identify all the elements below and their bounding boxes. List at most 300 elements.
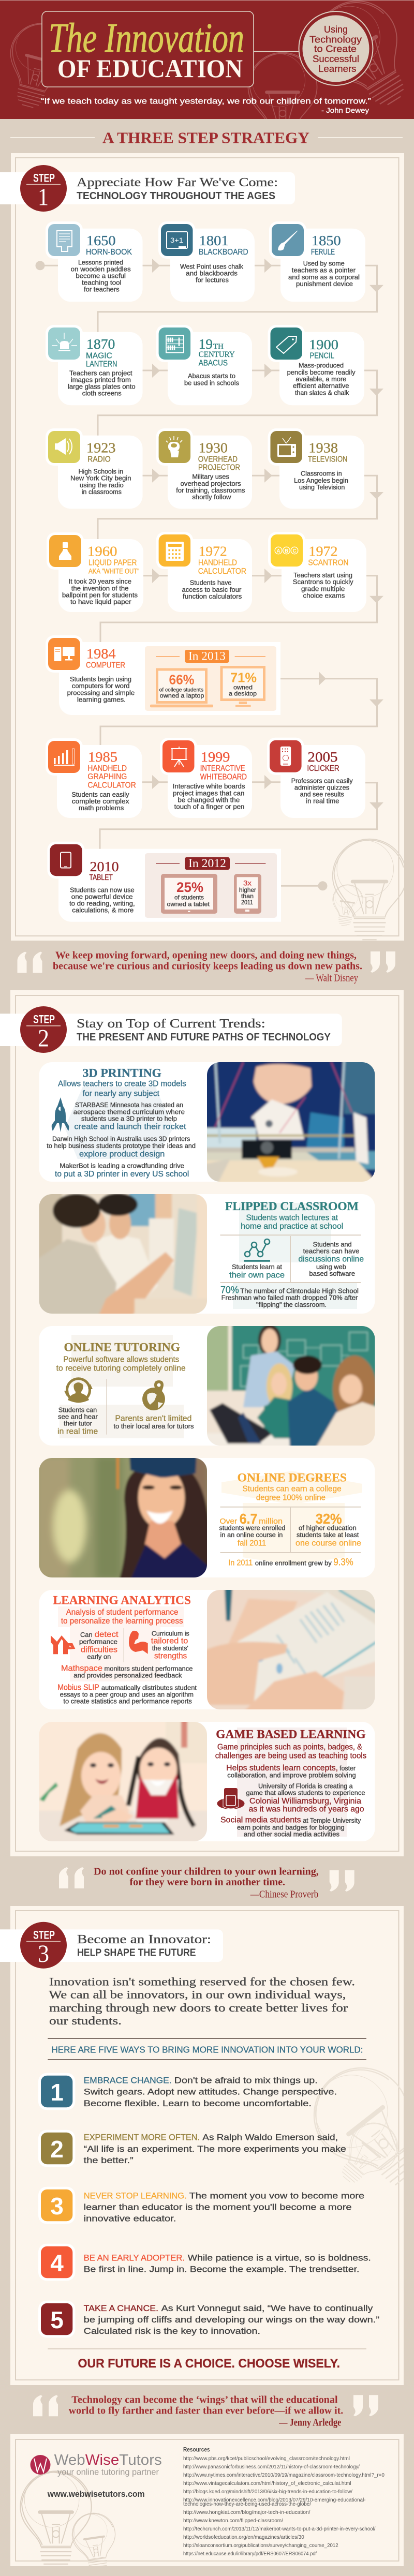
card: 1870 magic lantern (46, 325, 143, 405)
social media copy: Social media students (220, 1816, 301, 1825)
way 1 embrace change (38, 2073, 337, 2110)
quote: walt disney: We keep moving forward, opening new doors, and doing new things, (55, 950, 357, 961)
connector line (254, 51, 299, 52)
resources list: http://www.nytimes.com/interactive/2010/09/19/magazine/classroom-technology.html?_r=0 (183, 2472, 385, 2478)
quote: chinese proverb: Do not confine your children to your own learning, (94, 1866, 319, 1877)
card: 2010 tablet with 2012 stats: TABLET (89, 873, 113, 882)
description: New York City begin (70, 474, 131, 482)
description: on wooden paddles (71, 265, 131, 273)
description: the invention of the (71, 584, 128, 592)
description (182, 579, 242, 600)
description: teachers as a pointer (292, 266, 356, 274)
tutoring copy right: Parents aren't limited (115, 1414, 191, 1423)
card: 1801 blackboard: BLACKBOARD (199, 248, 248, 257)
logo (30, 2452, 162, 2477)
panel: flipped classroom: Students watch lectures at (246, 1213, 338, 1222)
quote: jenny arledge: world to fly farther and faster than ever before—if we allow it. (69, 2406, 343, 2417)
icon: calculator (159, 534, 190, 567)
description: Students have (190, 579, 231, 587)
intro paragraph (49, 1975, 355, 2027)
step 1 heading (0, 165, 295, 212)
concepts copy: collaboration, and improve problem solving (227, 1771, 356, 1779)
description: large glass plates onto (68, 383, 136, 391)
description: be used in schools (184, 379, 239, 387)
icon: scantron bubbles: C (293, 548, 296, 554)
icon: magic lantern (48, 327, 80, 360)
body copy: students use a 3D printer to help (81, 1114, 177, 1122)
title box (42, 11, 254, 87)
body copy: create and launch their rocket (74, 1123, 186, 1131)
panel: 3d printing: Allows teachers to create 3D models (58, 1079, 186, 1088)
card: 2010 tablet with 2012 stats: 2010 (90, 859, 119, 874)
quote: walt disney (18, 950, 395, 984)
laptop stat: owned a laptop (160, 692, 204, 699)
icon: closing quote mark (330, 1870, 354, 1892)
card: 1900 pencil (268, 325, 364, 405)
detection copy: Can (80, 1631, 93, 1639)
title script line: The Innovation (49, 16, 244, 61)
panel: online tutoring: to receive tutoring completely online (56, 1364, 186, 1373)
body copy (47, 1101, 196, 1179)
phone stat: 3x (243, 879, 252, 887)
way 2 experiment more often: EXPERIMENT MORE OFTEN. (84, 2133, 200, 2142)
step 3 heading: 3 (38, 1940, 49, 1968)
curriculum copy (151, 1630, 189, 1661)
description: Military uses (192, 473, 229, 481)
card: 1960 liquid paper: 1960 (87, 543, 117, 559)
way 3 never stop learning: The moment you vow to become more (189, 2192, 364, 2201)
quote: jenny arledge (33, 2394, 378, 2428)
description: in real time (306, 797, 339, 805)
panel: online degrees: degree 100% online (256, 1494, 326, 1502)
university of florida copy: as it was hundreds of years ago (249, 1805, 364, 1814)
icon: horn-book (48, 224, 80, 256)
card: 2005 iclicker: ICLICKER (307, 764, 339, 773)
quote: chinese proverb (59, 1866, 354, 1900)
description: Los Angeles begin (294, 477, 348, 484)
icon: opening quote mark (18, 952, 42, 973)
description: project images that can (173, 789, 244, 797)
heading: 3D PRINTING (83, 1067, 161, 1080)
icon: remote clicker (270, 740, 302, 772)
way 5 take a chance: Calculated risk is the key to innovation. (84, 2327, 260, 2336)
mathspace and mobius copy: essays to a peer group and uses an algorithm (60, 1691, 194, 1699)
header banner (0, 0, 414, 119)
description: math problems (79, 804, 124, 812)
subtitle circle (299, 11, 373, 85)
description: Lessons printed (78, 258, 123, 266)
way 1 embrace change: Don't be afraid to mix things up. (174, 2076, 318, 2086)
social media copy (220, 1816, 361, 1838)
way 5 take a chance: TAKE A CHANCE. (84, 2304, 158, 2313)
logo: your online tutoring partner (57, 2467, 159, 2477)
dividers (220, 1507, 361, 1553)
description: ballpoint pen for students (62, 591, 138, 599)
title serif line: OF EDUCATION (57, 54, 243, 83)
icon: blackboard: 3+1 (170, 236, 183, 244)
way 3 never stop learning: innovative educator. (84, 2214, 176, 2224)
icon: tablet (50, 844, 82, 876)
resources list: http://www.knewton.com/flipped-classroom/ (183, 2518, 283, 2524)
photo: 3d printer (204, 1060, 378, 1184)
description: processing and simple (67, 689, 135, 696)
header quote: - John Dewey (321, 106, 369, 114)
description (176, 473, 245, 501)
description: computers for word (72, 682, 129, 690)
description: calculations, & more (72, 906, 134, 914)
heading: GAME BASED LEARNING (216, 1728, 366, 1740)
description (294, 470, 348, 491)
stat copy: Freshman who failed math dropped 70% after (221, 1293, 358, 1301)
desktop stat: owned (233, 684, 253, 691)
tablet stat: 25% (176, 880, 203, 895)
card: 1801 blackboard: 1801 (199, 233, 229, 248)
stat copy: teachers can have (303, 1247, 359, 1255)
panel: 3d printing (39, 1060, 378, 1184)
icon: decline chart (51, 1635, 75, 1654)
resources list: http://www.pbs.org/kcet/publicschool/evolving_classroom/technology.html (183, 2455, 350, 2462)
card: 19th century abacus: CENTURY (199, 350, 235, 359)
curriculum copy: the students' (152, 1644, 188, 1652)
description: and some as a corporal (288, 273, 360, 281)
card: 1930 overhead projector: 1930 (199, 440, 228, 455)
step 3 heading (0, 1922, 223, 1969)
intro paragraph: marching through new doors to create better lives for (49, 2001, 348, 2014)
stat: 6.7 million: fall 2011 (238, 1539, 266, 1548)
card: 1999 interactive whiteboard: 1999 (201, 749, 230, 765)
panel: footer (10, 2434, 404, 2574)
way 4 be an early adopter: While patience is a virtue, so is boldness. (188, 2254, 371, 2263)
stat copy: using web (316, 1263, 346, 1271)
resources list: http://sloanconsortium.org/publications/survey/changing_course_2012 (183, 2542, 338, 2549)
icon: closing quote mark (353, 2395, 378, 2416)
description: Teachers start using (293, 571, 352, 579)
body copy: aerospace themed curriculum where (73, 1108, 185, 1115)
logo: WebWiseTutors (54, 2452, 162, 2468)
subtitle circle: to Create (314, 44, 357, 54)
card: 1938 television (268, 428, 364, 509)
description: to do reading, writing, (69, 900, 135, 907)
card: 1984 computer with 2013 stats (46, 635, 280, 715)
card: 19th century abacus: TH (213, 343, 224, 351)
icon: bar graph (48, 741, 80, 773)
card: 1960 liquid paper: AKA "WHITE OUT" (88, 567, 140, 575)
resources list: http://www.innovationexcellence.com/blog/2013/07/29/10-emerging-educational- (183, 2497, 366, 2503)
stat: 6.7 million: million (259, 1517, 283, 1526)
decorative bulbs bottom right (329, 839, 406, 940)
card: 1984 computer with 2013 stats: COMPUTER (86, 661, 125, 670)
divider (106, 1379, 107, 1435)
closing line: OUR FUTURE IS A CHOICE. CHOOSE WISELY. (78, 2357, 340, 2371)
card: 1938 television: TELEVISION (308, 455, 347, 464)
tutoring copy left: in real time (57, 1427, 98, 1436)
description: Students can now use (70, 886, 135, 894)
step 1 heading: 1 (38, 184, 49, 211)
description (71, 791, 129, 812)
step 1 heading: STEP (33, 172, 55, 185)
stat copy: their own pace (229, 1271, 285, 1279)
phone stat (234, 874, 261, 914)
description: overhead projectors (180, 480, 241, 487)
detection copy (79, 1630, 119, 1661)
icon: scantron bubbles: A (276, 548, 280, 554)
icon: globe with pin (142, 1380, 165, 1410)
stat: 32 percent: 32% (316, 1511, 342, 1527)
quote: jenny arledge: Technology can become the ‘wings’ that will the educational (71, 2394, 338, 2405)
step 1 heading: Appreciate How Far We've Come: (77, 176, 278, 189)
description: to have liquid paper (70, 598, 131, 605)
way 3 never stop learning (38, 2187, 364, 2224)
card: 1870 magic lantern: LANTERN (86, 360, 117, 369)
photo: students with teacher (204, 1323, 378, 1448)
card: 1900 pencil: 1900 (309, 337, 338, 352)
step 2 heading (0, 1006, 342, 1053)
way 5 take a chance (38, 2301, 379, 2337)
desktop stat (221, 667, 264, 707)
description: using Television (299, 483, 345, 491)
icon: scantron bubbles (271, 534, 303, 567)
description (184, 372, 239, 387)
description (180, 263, 243, 284)
card: 1938 television: 1938 (308, 440, 338, 455)
description (293, 571, 353, 599)
panel: learning analytics: to personalize the learning process (61, 1617, 183, 1626)
resources list: http://www.panasonicforbusiness.com/2012/11/history-of-classroom-technology/ (183, 2464, 360, 2470)
social media copy: and other social media activities (244, 1830, 339, 1838)
card: 1801 blackboard (158, 221, 255, 302)
tablet stat: of students (174, 894, 204, 901)
description: complete complex (72, 797, 129, 805)
description: punishment device (296, 280, 353, 288)
body copy: Darwin High School in Australia uses 3D printers (52, 1135, 190, 1143)
step 2 heading: THE PRESENT AND FUTURE PATHS OF TECHNOLOGY (77, 1032, 331, 1043)
way 5 take a chance: As Kurt Vonnegut said, “We have to continually (161, 2304, 373, 2313)
description (68, 369, 136, 397)
card: 1850 ferule: 1850 (312, 233, 341, 248)
resources list: http://www.hongkiat.com/blog/major-tech-in-education/ (183, 2509, 310, 2515)
mathspace and mobius copy: automatically distributes student (101, 1684, 197, 1691)
stat copy: Students learn at (232, 1263, 282, 1271)
decorative bulbs (20, 2471, 120, 2574)
description: efficient alternative (293, 382, 349, 390)
description: images printed from (71, 376, 131, 383)
card: 1923 radio: 1923 (86, 440, 116, 455)
photo: children with tablet (36, 1719, 210, 1844)
stat: 32 percent: of higher education (299, 1524, 357, 1532)
icon: television (270, 431, 302, 463)
concepts copy (226, 1764, 356, 1779)
social media copy: earn points and badges for blogging (237, 1823, 345, 1831)
intro paragraph: Innovation isn't something reserved for the chosen few. (49, 1975, 355, 1988)
body copy: MakerBot is leading a crowdfunding drive (60, 1162, 184, 1170)
detection copy: difficulties (81, 1645, 117, 1654)
laptop stat (150, 669, 213, 707)
panel: step 1 timeline (0, 153, 406, 941)
card: 19th century abacus (156, 325, 252, 405)
description: for teachers (84, 285, 120, 293)
card: 1960 liquid paper (47, 532, 143, 612)
stat: enrollment growth: 9.3% (333, 1557, 353, 1568)
intro paragraph: our students. (49, 2014, 122, 2027)
way 1 embrace change: 1 (50, 2079, 64, 2106)
panel: online tutoring: Powerful software allows students (63, 1356, 179, 1364)
card: 1999 interactive whiteboard: INTERACTIVE (200, 764, 245, 773)
description: Interactive white boards (173, 782, 245, 790)
panel: step 2 trends (0, 990, 404, 1856)
card: 1930 overhead projector: PROJECTOR (198, 464, 240, 472)
card: 1850 ferule (269, 221, 365, 302)
card: 2005 iclicker (267, 738, 365, 818)
description (71, 258, 131, 293)
desktop stat: 71% (230, 669, 257, 685)
stat: 6.7 million: 6.7 (240, 1511, 257, 1527)
card: 1900 pencil: PENCIL (309, 351, 334, 360)
stat: 6.7 million: Over (219, 1517, 237, 1526)
icon: pencil (270, 327, 302, 360)
detection copy: early on (87, 1653, 111, 1661)
subtitle circle: Using (324, 24, 348, 35)
panel: online degrees: Students can earn a college (242, 1485, 342, 1494)
icon: progress graph (244, 1239, 270, 1261)
step 2 heading: Stay on Top of Current Trends: (77, 1017, 265, 1031)
card: 1972 scantron: SCANTRON (308, 559, 349, 568)
icon: computer (48, 638, 80, 670)
card: 1984 computer with 2013 stats: 1984 (86, 646, 116, 661)
icon: liquid paper (49, 535, 81, 567)
resources list: http://worldsofeducation.org/en/magazines/articles/30 (183, 2534, 304, 2540)
in 2013 stats panel (145, 646, 276, 711)
description: for lectures (196, 276, 229, 284)
card: 1985 graphing calculator: 1985 (88, 749, 117, 765)
detection copy: detect (95, 1630, 119, 1639)
section heading: a three step strategy: A THREE STEP STRATEGY (102, 129, 309, 147)
card: 1985 graphing calculator (46, 738, 142, 818)
way 2 experiment more often: the better.” (84, 2156, 134, 2165)
description: pencils become readily (287, 368, 356, 376)
resources list: http://blogs.kqed.org/mindshift/2013/06/six-big-trends-in-education-to-follow/ (183, 2489, 352, 2495)
panel: 3d printing: for nearly any subject (83, 1089, 160, 1098)
dividers (220, 1235, 361, 1283)
photo: graduate (36, 1455, 210, 1580)
card: 19th century abacus: ABACUS (199, 359, 228, 368)
description: Abacus starts to (188, 372, 235, 380)
icon: blackboard (161, 224, 193, 256)
description: and blackboards (186, 270, 238, 277)
description (67, 675, 135, 703)
description: High Schools in (79, 468, 123, 475)
in 2013 stats panel: In 2013 (188, 650, 226, 663)
description: and see results (300, 791, 344, 798)
resources list: http://techcrunch.com/2013/11/12/makerbot-wants-to-put-a-3d-printer-in-every-school/ (183, 2526, 376, 2532)
quote: walt disney: — Walt Disney (305, 973, 358, 984)
icon: scantron bubbles: B (285, 548, 288, 554)
quote: walt disney: because we're curious and curiosity keeps leading us down new paths. (53, 961, 362, 972)
description: grade multiple (301, 585, 345, 592)
curriculum copy: tailored to (151, 1637, 188, 1646)
card: 1650 horn-book: HORN-BOOK (86, 248, 132, 257)
way 4 be an early adopter: Be first in line. Jump in. Become the example. The trendsetter. (84, 2265, 359, 2274)
description: Teachers can project (69, 369, 132, 377)
way 3 never stop learning: NEVER STOP LEARNING. (84, 2192, 187, 2201)
way 5 take a chance: 5 (50, 2306, 64, 2333)
card: 1985 graphing calculator: GRAPHING (87, 772, 127, 781)
panel: game based learning (36, 1719, 375, 1844)
description (288, 260, 360, 288)
intro paragraph: We can all be innovators, in our own individual ways, (49, 1988, 346, 2001)
card: 1972 handheld calculator: 1972 (199, 543, 227, 559)
mathspace and mobius copy (57, 1664, 197, 1705)
panel: learning analytics: Analysis of student performance (66, 1608, 178, 1617)
description (287, 362, 356, 396)
description: West Point uses chalk (180, 263, 243, 271)
decorative light bulbs (0, 0, 414, 146)
icon: tutor in cycle (64, 1379, 93, 1403)
stat: enrollment growth: In 2011 (228, 1559, 253, 1568)
icon: opening quote mark (33, 2395, 58, 2416)
step 2 heading: 2 (38, 1024, 49, 1052)
mathspace and mobius copy: monitors student performance (105, 1664, 193, 1672)
description: Students begin using (70, 675, 131, 683)
stat: 32 percent: students take at least (297, 1531, 359, 1539)
university of florida copy: Colonial Williamsburg, Virginia (249, 1797, 361, 1806)
resources list (183, 2447, 385, 2557)
way 1 embrace change: Switch gears. Adopt new attitudes. Change perspective. (84, 2088, 337, 2097)
way 4 be an early adopter (38, 2244, 371, 2281)
stat: 32 percent: one course online (295, 1539, 361, 1548)
way 1 embrace change: EMBRACE CHANGE. (84, 2076, 172, 2086)
step 3 heading: STEP (33, 1928, 55, 1941)
way 3 never stop learning: 3 (50, 2193, 64, 2220)
heading: ONLINE TUTORING (64, 1341, 180, 1354)
card: 1650 horn-book: 1650 (86, 233, 116, 248)
stat copy: The number of Clintondale High School (240, 1287, 359, 1294)
card: 1972 scantron (268, 532, 366, 612)
description: than slates & chalk (295, 389, 349, 396)
tablet stat: owned a tablet (167, 901, 210, 908)
detection copy: performance (79, 1638, 117, 1646)
description (62, 577, 138, 605)
card: 1923 radio (46, 428, 143, 509)
subtitle circle: Learners (318, 64, 356, 74)
stat copy: Students and (313, 1240, 352, 1248)
photo: tablet with charts (204, 1587, 378, 1712)
description: Scantrons to quickly (293, 578, 353, 586)
stat: enrollment growth: online enrollment grew by (255, 1559, 332, 1567)
panel: learning analytics (39, 1587, 378, 1712)
resources list: https://net.educause.edu/ir/library/pdf/ERS0607/ERS06074.pdf (183, 2551, 317, 2557)
panel: game based learning: challenges are being used as teaching tools (215, 1752, 366, 1761)
stat copy (220, 1240, 364, 1308)
card: 1999 interactive whiteboard: WHITEBOARD (200, 773, 247, 782)
photo: students at computer (36, 1192, 210, 1316)
tutoring copy right (113, 1414, 194, 1430)
description: cloth screens (82, 390, 122, 397)
description: touch of a finger or pen (174, 803, 244, 811)
card: 1650 horn-book (46, 221, 143, 302)
header quote: “If we teach today as we taught yesterday, we rob our children of tomorrow.” (41, 97, 371, 106)
social media copy: at Temple University (303, 1816, 361, 1824)
way 2 experiment more often: “All life is an experiment. The more experiments you make (84, 2145, 346, 2154)
body copy: to help business students prototype their ideas and (47, 1142, 196, 1150)
tutoring copy left (57, 1406, 98, 1436)
stat: 32 percent (295, 1511, 361, 1548)
tutoring copy right: to their local area for tutors (113, 1422, 194, 1430)
description: become a useful (76, 272, 126, 279)
way 4 be an early adopter: 4 (50, 2250, 64, 2276)
curriculum copy: Curriculum is (152, 1630, 189, 1637)
subtitle circle: Successful (313, 54, 359, 64)
laptop stat: 66% (169, 672, 195, 688)
